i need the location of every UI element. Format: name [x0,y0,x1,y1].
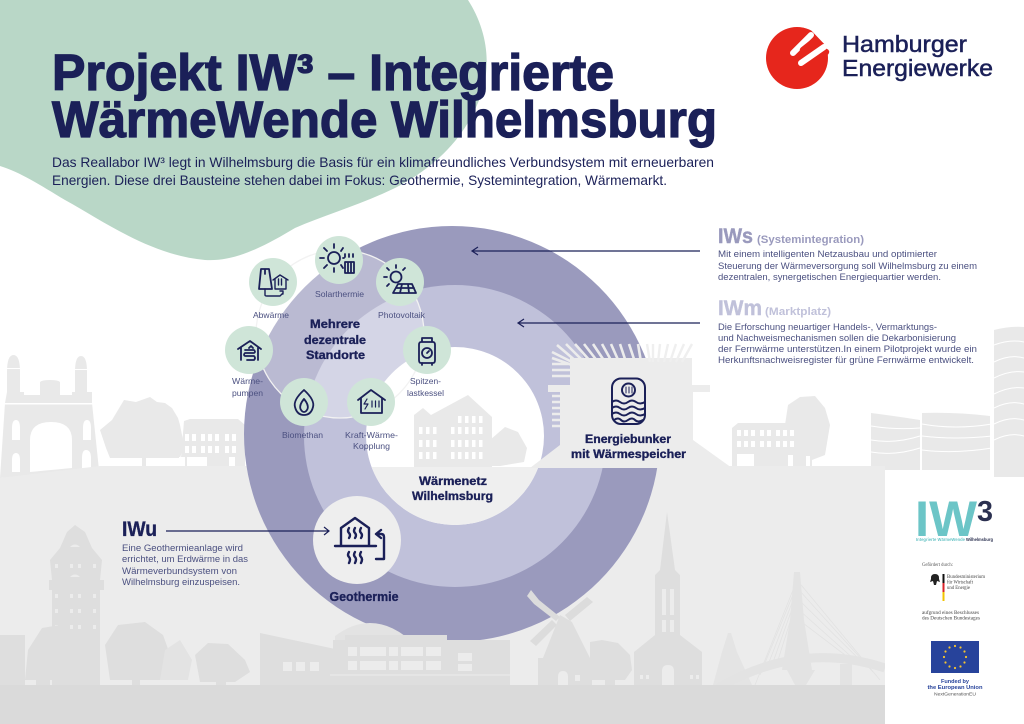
text block: IWs [718,249,977,282]
text block: IWs: Mit einem intelligenten Netzausbau und optimierter [718,249,937,259]
label: Wärmenetz Wilhelmsburg: Wilhelmsburg [412,489,493,503]
outer ring: IWs [244,226,660,642]
windmill [527,590,593,685]
text: Gefördert durch: Gefördert durch: [922,563,953,568]
distant skyline: right buildings [732,327,1024,480]
node: Solarthermie [315,236,364,299]
panel: Mehrere dezentrale Standorte [225,236,451,451]
label: Geothermie: Geothermie [330,589,398,604]
text block: IWm: Die Erforschung neuartiger Handels-, Vermarktungs- [718,322,937,332]
intro text [52,154,714,188]
title: Projekt IW³ – Integrierte [52,44,614,101]
text block: IWu [122,543,249,587]
inner disk: Wärmenetz [360,347,550,527]
callout: IWm Marktplatz [518,297,977,365]
text: Funded by the European Union: NextGenerationEU [934,692,976,696]
wordmark: Energiewerke [842,55,993,81]
logo: BMWi: und Energie [947,586,971,591]
logo: IW3: Wilhelmsburg [966,537,993,542]
foreground skyline [0,512,885,688]
node: Wärmepumpen: Wärme- [232,376,263,386]
text: Bundestag resolution: aufgrund eines Beschlusses [922,611,979,616]
label: Energiebunker [571,432,686,461]
heading: Mehrere dezentrale Standorte [304,317,366,362]
middle ring: IWm [304,285,606,587]
label: Energiebunker: Energiebunker [585,432,671,446]
label: Wärmenetz Wilhelmsburg [412,474,493,503]
text: Funded by the European Union: Funded by [941,679,970,685]
logo: IW3: 3 [977,496,993,528]
text block: IWu: Wilhelmsburg einzuspeisen. [122,577,240,587]
arrow: to outer ring [472,247,700,255]
logo: IW3: Integrierte WärmeWende [916,537,965,542]
text block: IWm [718,322,977,365]
text block: IWu: Wärmeverbundsystem von [122,566,237,576]
heading: IWs: (Systemintegration) [757,234,864,246]
text: Bundestag resolution [922,611,980,622]
node: Kraft-Wärme-Kopplung: Kopplung [353,441,390,451]
distant skyline: left gate, tree and building [0,355,245,478]
callout: IWs Systemintegration [472,225,977,282]
node: Abwärme [249,258,297,320]
label: Energiebunker: mit Wärmespeicher [571,447,686,461]
bottom ground band [0,685,885,724]
heading: IWm: (Marktplatz) [765,306,831,318]
node: Kraft-Wärme-Kopplung [345,378,398,451]
buildings bottom centre [260,633,340,685]
node: Spitzenlastkessel: lastkessel [407,388,444,398]
node: Wärmepumpen [225,326,273,398]
title [52,44,717,148]
heading: IWm: IWm [718,297,762,320]
energy bunker building [530,344,732,468]
bridge [713,572,885,688]
ground [0,466,885,724]
node: Biomethan [280,378,328,440]
logo: BMWi: Bundesministerium [947,575,985,580]
panel: sponsors [885,477,1024,724]
logo: BMWi [930,574,985,601]
text: Bundestag resolution: des Deutschen Bundestages [922,616,980,622]
node: Photovoltaik: Photovoltaik [378,310,426,320]
heading: IWm [718,297,831,320]
arrow: to Geothermie [166,527,329,535]
logo: Hamburger Energiewerke [766,15,993,89]
icon: heat storage tank [612,378,645,424]
intro text: Energien. Diese drei Bausteine stehen dabei im Fokus: Geothermie, Systemintegration, Wärmemarkt. [52,172,667,188]
arrow: to middle ring [518,319,700,327]
callout: IWu [122,518,329,587]
text: Funded by the European Union [928,679,983,696]
node: Kraft-Wärme-Kopplung: Kraft-Wärme- [345,430,398,440]
heading: IWu: IWu [122,518,157,541]
node: Solarthermie: Solarthermie [315,289,364,299]
text block: IWm: Herkunftsnachweisregister für grüne Fernwärme entwickelt. [718,355,974,365]
icon: logo mark [766,15,845,89]
church [634,512,702,685]
text: Funded by the European Union: the European Union [928,685,983,691]
heading: IWs: IWs [718,225,753,248]
heading: Mehrere dezentrale Standorte: dezentrale [304,333,366,347]
node: Spitzenlastkessel [403,326,451,398]
logo: EU flag [931,641,979,673]
text block: IWs: Steuerung der Wärmeversorgung soll Wilhelmsburg zu einem [718,261,977,271]
text block: IWu: errichtet, um Erdwärme in das [122,554,249,564]
node: Photovoltaik [376,258,426,320]
heading: Mehrere dezentrale Standorte: Standorte [306,348,365,362]
heading: Mehrere dezentrale Standorte: Mehrere [310,317,360,331]
water tower [49,525,104,685]
trees left [0,622,172,685]
text block: IWm: der Fernwärme unterstützen.In einem Pilotprojekt wurde ein [718,344,977,354]
logo: BMWi: für Wirtschaft [947,580,974,586]
node: Spitzenlastkessel: Spitzen- [410,376,441,386]
text block: IWs: dezentralen, synergetischen Energiequartier werden. [718,272,941,282]
label: Wärmenetz Wilhelmsburg: Wärmenetz [419,474,487,488]
node: Biomethan: Biomethan [282,430,323,440]
tree centre [590,640,632,685]
mint background blob [0,0,487,260]
node: Geothermie [313,496,401,604]
intro text: Das Reallabor IW³ legt in Wilhelmsburg die Basis für ein klimafreundliches Verbundsystem mit erneuerbaren [52,154,714,170]
text block: IWu: Eine Geothermieanlage wird [122,543,243,553]
icon: geothermal house [335,518,384,563]
circle diagram [244,226,660,642]
text block: IWm: und Nachweismechanismen sollen die Dekarbonisierung [718,333,956,343]
node: Wärmepumpen: pumpen [232,388,263,398]
node: Abwärme: Abwärme [253,310,289,320]
title: WärmeWende Wilhelmsburg [52,91,717,148]
heading: IWs [718,225,864,248]
wordmark [842,31,993,81]
logo: IW3: IW [915,491,978,547]
wordmark: Hamburger [842,31,967,57]
